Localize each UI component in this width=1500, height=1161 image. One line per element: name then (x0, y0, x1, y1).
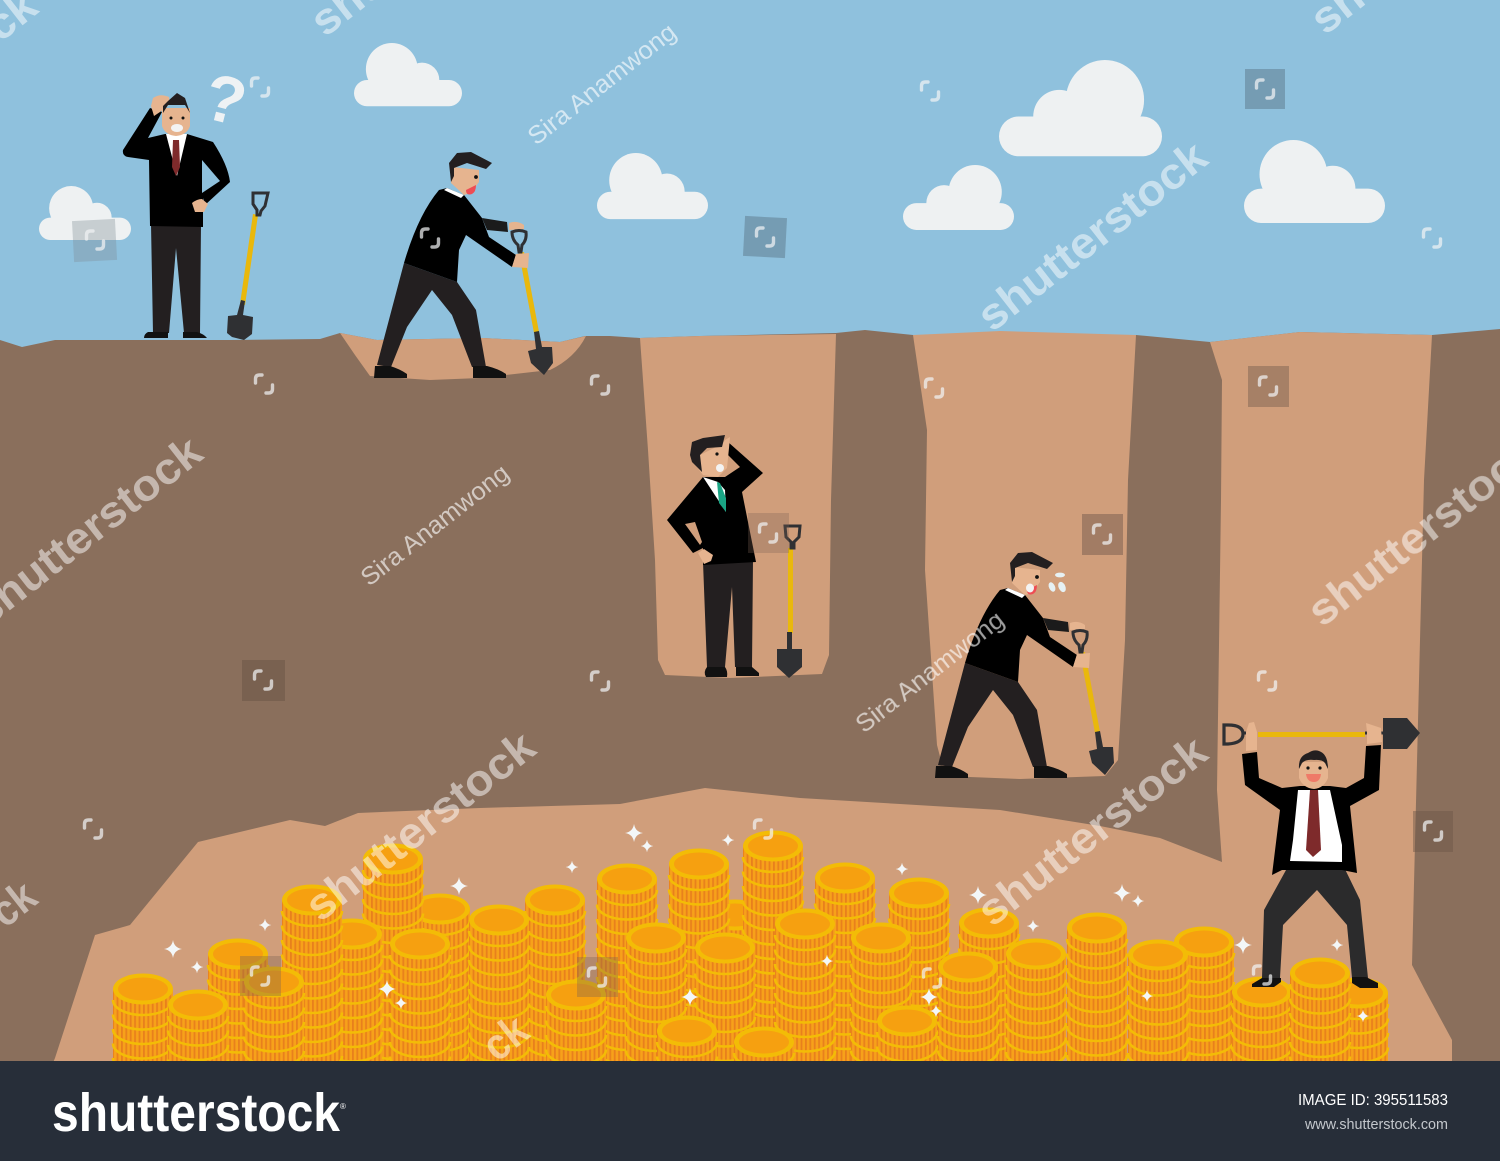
site url: www.shutterstock.com (1304, 1117, 1448, 1133)
second shaft (640, 334, 836, 678)
businessman 3: in shaft, hand on forehead (667, 435, 763, 677)
sparkles (164, 824, 1369, 1022)
stock watermark text: shutterstock (968, 131, 1217, 341)
ground (0, 329, 1500, 1070)
shovel standing beside businessman 1 (227, 193, 268, 340)
coin stacks (113, 830, 1388, 1118)
stock watermark text: Sira Anamwong (850, 606, 1010, 739)
clouds (39, 43, 1385, 240)
businessman 2: digging on the surface (374, 152, 524, 378)
sky background (0, 0, 1500, 345)
stock watermark text: ck (473, 1005, 538, 1071)
third shaft (913, 331, 1136, 779)
stock watermark icons (72, 69, 1453, 997)
sweat drops (1026, 573, 1067, 593)
stock watermark text: shutterstock (968, 726, 1217, 936)
businessman 5: celebrating on the gold (1224, 718, 1420, 988)
stock watermark text: Sira Anamwong (522, 18, 682, 151)
businessman 1: confused, hand on head (123, 93, 230, 338)
stock watermark text: shutterstock (296, 721, 545, 931)
stock watermark text: Sira Anamwong (355, 459, 515, 592)
shovel of businessman 3 (777, 526, 802, 678)
registered mark: ® (340, 1102, 346, 1111)
fourth shaft and treasure cave (50, 332, 1452, 1070)
footer bar (0, 1061, 1500, 1161)
shovel of businessman 4 (1073, 630, 1114, 775)
question mark: ? (197, 59, 254, 140)
footer logo: shutterstock (52, 1083, 341, 1143)
image id: IMAGE ID: 395511583 (1298, 1092, 1448, 1109)
shallow first pit (340, 333, 586, 380)
shovel of businessman 2 (512, 230, 553, 375)
businessman 4: digging and sweating (935, 552, 1085, 778)
